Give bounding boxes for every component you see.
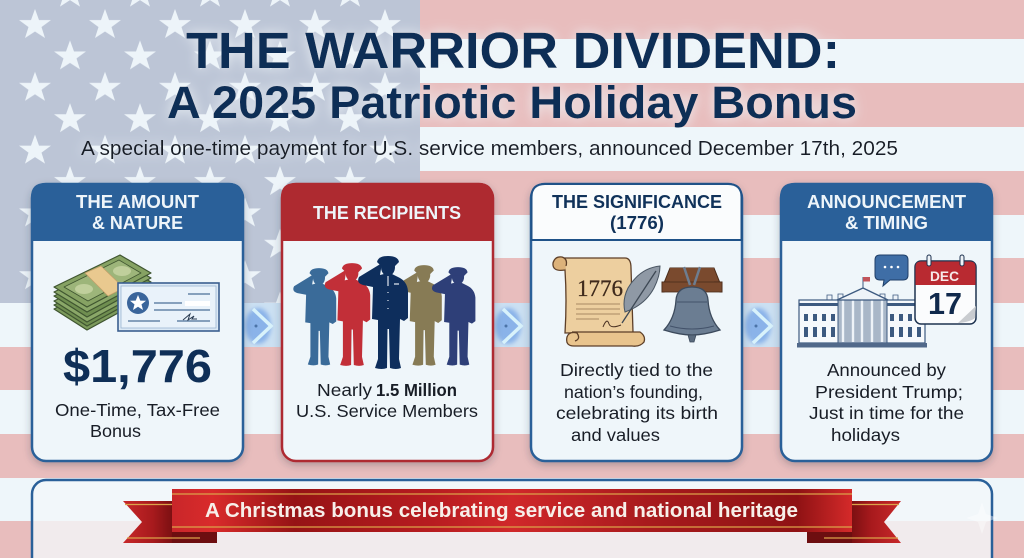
description: significance: and values bbox=[571, 425, 660, 445]
description: recipients count: U.S. Service Members bbox=[296, 401, 478, 421]
panel: bottom banner area bbox=[32, 480, 992, 558]
icon: speech bubble bbox=[875, 255, 908, 286]
icon: check bbox=[118, 283, 219, 331]
panel: the recipients bbox=[281, 183, 493, 461]
heading: announcement and timing: & TIMING bbox=[845, 213, 928, 233]
heading: the amount and nature bbox=[76, 192, 199, 233]
icon: sparkle bbox=[966, 502, 998, 534]
description: announcement: Just in time for the bbox=[809, 403, 964, 423]
description: announcement bbox=[809, 360, 964, 445]
description: significance: celebrating its birth bbox=[556, 403, 718, 423]
panel: the significance bbox=[531, 184, 742, 461]
description: one-time tax-free bonus bbox=[55, 400, 220, 441]
description: significance bbox=[556, 360, 718, 445]
heading: the amount and nature: & NATURE bbox=[92, 213, 183, 233]
amount: $1,776 bbox=[63, 340, 212, 392]
icon: scroll and quill: 1776 bbox=[577, 276, 623, 301]
icon: liberty bell bbox=[662, 267, 722, 342]
description: recipients count: Nearly bbox=[317, 380, 372, 400]
description: significance: Directly tied to the bbox=[560, 360, 713, 380]
title: A 2025 Patriotic Holiday Bonus bbox=[167, 77, 857, 128]
icon: calendar December 17: DEC bbox=[930, 269, 959, 284]
description: announcement: Announced by bbox=[827, 360, 946, 380]
heading: announcement and timing: ANNOUNCEMENT bbox=[807, 192, 966, 212]
panel: the amount and nature bbox=[31, 183, 243, 461]
heading: the significance: THE SIGNIFICANCE bbox=[552, 192, 722, 212]
icon: saluting service members bbox=[293, 256, 475, 369]
heading: the recipients: THE RECIPIENTS bbox=[313, 203, 461, 223]
description: recipients count bbox=[296, 380, 478, 421]
panel: announcement and timing bbox=[780, 183, 993, 461]
description: announcement: President Trump; bbox=[815, 382, 963, 402]
banner ribbon bbox=[123, 489, 901, 543]
icon: calendar December 17 bbox=[915, 255, 976, 324]
icon: calendar December 17: 17 bbox=[928, 286, 962, 321]
icon: scroll and quill bbox=[553, 257, 660, 346]
arrow: recipients to significance bbox=[493, 303, 530, 347]
subtitle: A special one-time payment for U.S. service members, announced December 17th, 2025 bbox=[81, 138, 898, 160]
heading: the significance: (1776) bbox=[610, 213, 664, 233]
heading: announcement and timing bbox=[807, 192, 966, 233]
description: recipients count: 1.5 Million bbox=[376, 380, 457, 400]
banner text: A Christmas bonus celebrating service and national heritage bbox=[205, 500, 798, 522]
arrow: amount to recipients bbox=[243, 303, 281, 347]
icon: stack of cash bbox=[54, 255, 151, 330]
description: announcement: holidays bbox=[831, 425, 900, 445]
arrow: significance to announcement bbox=[743, 303, 780, 347]
description: one-time tax-free bonus: One-Time, Tax-Free bbox=[55, 400, 220, 420]
title: THE WARRIOR DIVIDEND: bbox=[186, 22, 840, 79]
icon: white house bbox=[797, 277, 927, 348]
heading: the significance bbox=[552, 192, 722, 233]
description: significance: nation’s founding, bbox=[564, 382, 703, 402]
heading: the amount and nature: THE AMOUNT bbox=[76, 192, 199, 212]
description: one-time tax-free bonus: Bonus bbox=[90, 421, 141, 441]
title bbox=[167, 22, 857, 128]
